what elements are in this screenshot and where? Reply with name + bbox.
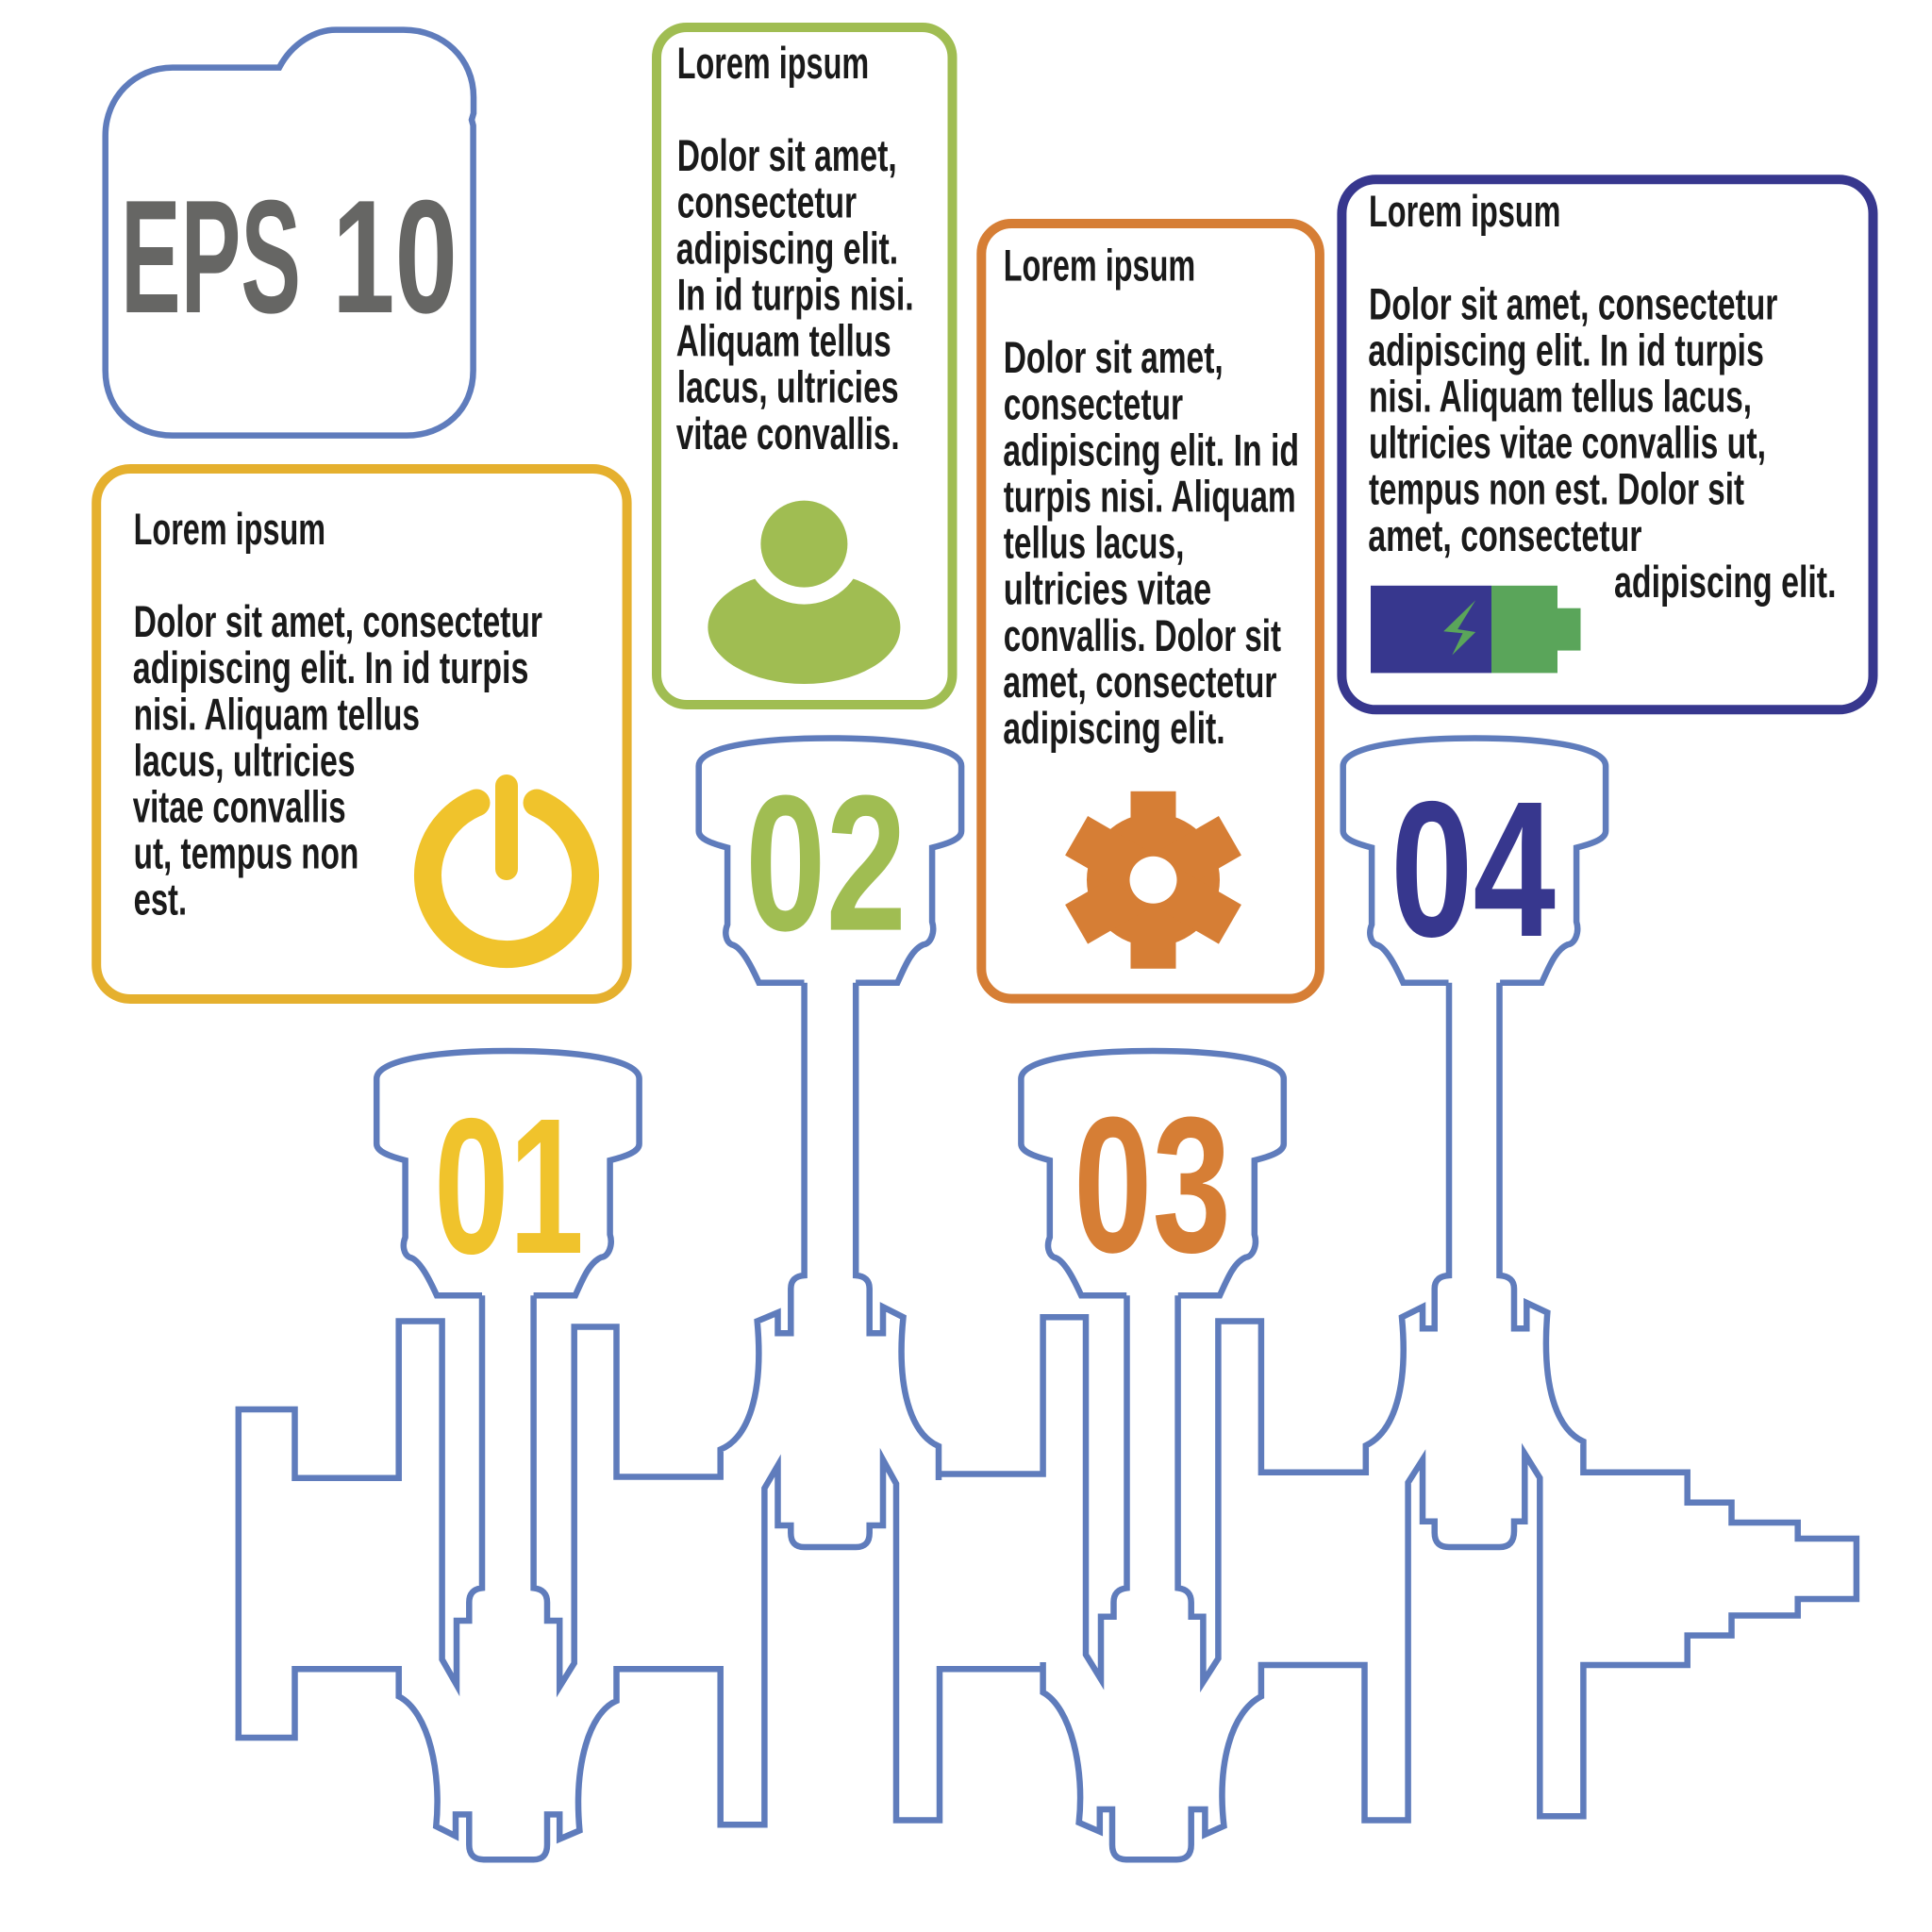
heading: Lorem ipsum [1004, 241, 1195, 291]
body text [1368, 278, 1836, 607]
body text: ultricies vitae [1004, 564, 1211, 614]
icon: battery [1371, 586, 1581, 673]
body text: amet, consectetur [1368, 510, 1642, 560]
body text: Dolor sit amet, consectetur [134, 596, 542, 646]
body text: adipiscing elit. In id turpis [133, 642, 528, 692]
number 02: 02 [745, 756, 907, 972]
panel: 01 yellow [96, 469, 627, 999]
piston head 01 [376, 1051, 640, 1295]
body text: vitae convallis. [676, 408, 900, 458]
body text [1003, 332, 1299, 753]
panel: 03 orange [981, 224, 1320, 999]
body text: Aliquam tellus [676, 316, 891, 366]
body text: lacus, ultricies [677, 362, 899, 412]
body text: turpis nisi. Aliquam [1004, 472, 1296, 522]
number 03: 03 [1074, 1077, 1231, 1293]
body text [676, 130, 914, 458]
body text: In id turpis nisi. [677, 270, 914, 320]
badge: EPS 10 [106, 30, 474, 436]
icon: person [708, 484, 900, 684]
panel: 04 navy [1341, 179, 1874, 709]
number 04: 04 [1391, 761, 1556, 977]
badge text: 10 [332, 167, 458, 347]
body text: Dolor sit amet, [1004, 332, 1224, 382]
body text: consectetur [1004, 378, 1183, 428]
heading: Lorem ipsum [134, 504, 325, 554]
crankshaft outline [236, 983, 1857, 1859]
heading: Lorem ipsum [1369, 186, 1560, 236]
body text: nisi. Aliquam tellus [134, 689, 420, 739]
body text: Dolor sit amet, [677, 130, 897, 180]
body text: adipiscing elit. [1614, 557, 1837, 607]
number 01: 01 [434, 1078, 584, 1294]
body text: lacus, ultricies [134, 735, 356, 785]
body text: adipiscing elit. [1003, 703, 1225, 753]
body text [133, 596, 542, 924]
body text: vitae convallis [133, 782, 346, 832]
body text: nisi. Aliquam tellus lacus, [1369, 372, 1752, 422]
piston head 04 [1343, 738, 1606, 983]
body text: ultricies vitae convallis ut, [1369, 418, 1766, 468]
heading: Lorem ipsum [677, 38, 869, 88]
body text: adipiscing elit. [676, 223, 898, 273]
body text: Dolor sit amet, consectetur [1369, 278, 1777, 328]
body text: est. [134, 874, 187, 924]
icon: power [428, 786, 585, 955]
badge text: EPS [121, 167, 301, 347]
body text: tempus non est. Dolor sit [1369, 464, 1744, 514]
body text: adipiscing elit. In id [1003, 425, 1299, 475]
body text: amet, consectetur [1003, 657, 1277, 707]
body text: tellus lacus, [1004, 518, 1184, 568]
panel: 02 green [657, 27, 953, 705]
piston head 02 [699, 738, 961, 983]
piston head 03 [1021, 1051, 1284, 1295]
body text: ut, tempus non [134, 828, 358, 878]
body text: consectetur [677, 176, 857, 226]
icon: gear [1065, 791, 1241, 969]
body text: convallis. Dolor sit [1004, 610, 1281, 660]
body text: adipiscing elit. In id turpis [1368, 325, 1764, 375]
